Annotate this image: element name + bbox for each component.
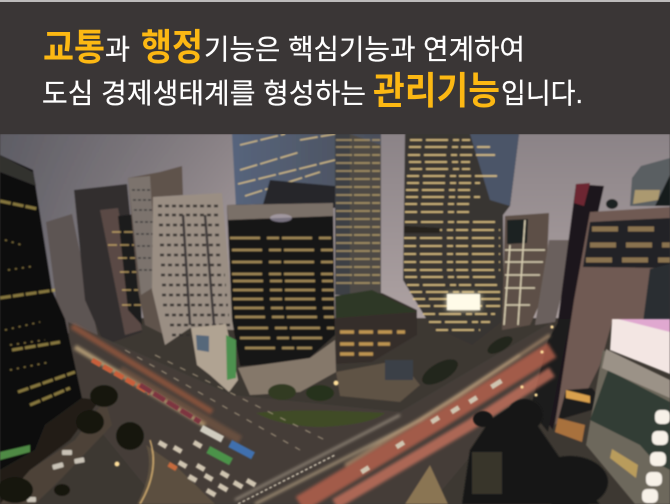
right building: dark plinth and street edge [530,319,570,432]
street base [68,322,552,504]
building: dark red tower [545,183,604,430]
building: dark mid tower [227,203,335,366]
trees along sidewalk [0,385,144,503]
crosswalk line [238,455,335,504]
sky [0,134,670,334]
left tower: dark glass [0,155,82,470]
podium white kiosk building [191,324,238,392]
distant right haze and street [535,240,575,325]
header band [0,0,670,134]
heading line 1 [43,27,525,68]
rooftop trees [606,199,618,209]
heading line 1: 과 [105,34,130,65]
lower-right crosswalk triangle [405,465,448,504]
streetlights [114,325,554,466]
building: pink-tan right block [555,207,670,442]
road markings [125,350,325,450]
heading line 1: 교통 [43,27,105,68]
cars queue [158,379,503,497]
building: mid-tower podium [238,340,336,395]
parked cars [27,450,85,502]
building: top-right glass tower [630,158,670,206]
building: white office tower [152,193,234,345]
building: rooftop screen [610,319,670,374]
traffic island: lawn [256,384,385,427]
building: blue glass tower behind [232,134,381,295]
bright billboard [447,294,480,310]
heading line 2: 입니다. [501,78,583,109]
heading line 2: 관리기능 [373,71,500,113]
plaza right of lawn [336,360,420,402]
lower-left curved plaza [137,440,215,504]
background building: far left cluster [46,184,142,345]
lower-left dark corner [0,398,100,504]
heading line 2: 도심 경제생태계를 형성하는 [42,78,366,109]
ground and streets [0,318,670,504]
heading line 2 [42,71,583,113]
buses in traffic queue [92,360,255,465]
photo: night city intersection [0,134,670,504]
right tree area [462,399,608,504]
heading line 1: 행정 [141,27,203,68]
heading line 1: 기능은 핵심기능과 연계하여 [204,34,525,65]
building: central tall tower [403,134,519,345]
building: tan tower [128,166,183,335]
building: lower-right white tower [586,349,670,504]
light trails [72,326,552,504]
building: lattice tower [502,213,549,330]
sidewalk lower left [0,400,112,504]
right sidewalk trees [418,333,515,390]
building: small block and green roof [335,290,417,364]
